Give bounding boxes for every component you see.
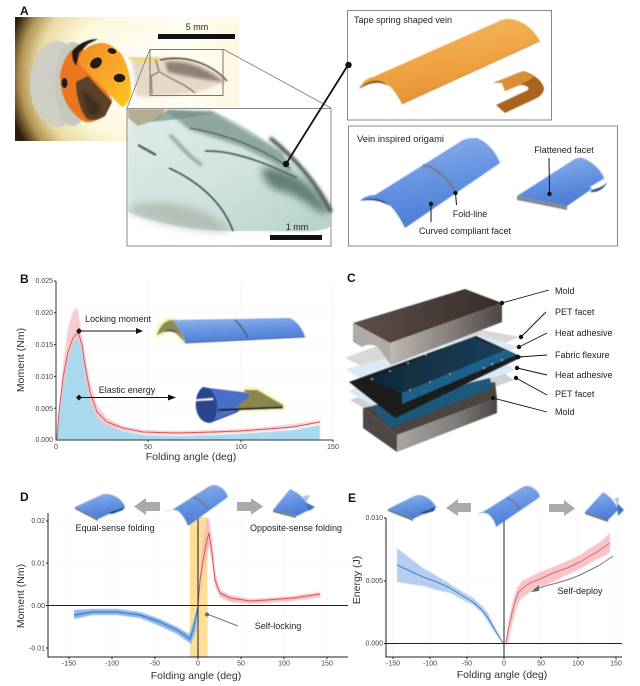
callout line from vein to detail boxes bbox=[283, 62, 352, 167]
label B: B bbox=[20, 272, 29, 286]
x ticks: 150 bbox=[327, 444, 339, 451]
negative energy curve bbox=[397, 565, 503, 643]
x ticks: -150 bbox=[62, 660, 76, 668]
scale bar 1 mm: 1 mm bbox=[286, 222, 308, 232]
panel B: moment chart bbox=[15, 272, 339, 463]
bottom mold bbox=[363, 378, 497, 452]
x ticks: 100 bbox=[235, 444, 247, 451]
axes bbox=[54, 281, 333, 442]
top PET layer bbox=[345, 322, 520, 385]
moment band bbox=[57, 307, 320, 438]
y-axis title: Energy (J) bbox=[351, 556, 363, 604]
x ticks: 150 bbox=[321, 660, 333, 668]
icon: flat origami centre bbox=[165, 485, 228, 526]
x ticks: 100 bbox=[572, 660, 584, 668]
bottom PET layer bbox=[350, 354, 514, 424]
gridlines bbox=[48, 513, 348, 657]
x ticks: 0 bbox=[502, 660, 506, 668]
positive energy band bbox=[506, 533, 610, 643]
x-axis title: Folding angle (deg) bbox=[146, 451, 236, 463]
self-deploy callout bbox=[531, 556, 613, 596]
moment curve bbox=[57, 333, 320, 439]
x ticks: 50 bbox=[537, 660, 545, 668]
orange tape spring bbox=[359, 19, 540, 104]
callout: mold bottom bbox=[491, 396, 575, 417]
x ticks: -100 bbox=[105, 660, 119, 668]
negative moment curve bbox=[74, 607, 198, 639]
callout: fabric flexure bbox=[516, 350, 610, 360]
flattened facet origami bbox=[517, 158, 607, 210]
elastic energy annotation: Elastic energy bbox=[99, 385, 156, 395]
fabric flexure bbox=[349, 336, 522, 418]
callout: PET facet top: PET facet bbox=[555, 307, 595, 317]
arrow right bbox=[549, 500, 575, 516]
arrow left bbox=[446, 499, 471, 516]
label: flattened facet bbox=[534, 145, 594, 196]
x ticks: 50 bbox=[237, 660, 245, 668]
icon: straight locked origami bbox=[155, 318, 305, 344]
y ticks: 0.000 bbox=[365, 640, 383, 648]
y ticks bbox=[35, 278, 53, 444]
callout: mold top bbox=[500, 286, 575, 305]
callout: heat adhesive top: Heat adhesive bbox=[555, 328, 613, 338]
bottom adhesive layer bbox=[348, 345, 516, 415]
self-deploy callout: Self-deploy bbox=[557, 586, 603, 596]
callout: PET facet top bbox=[519, 307, 595, 339]
scale bar 5 mm: 5 mm bbox=[186, 22, 208, 32]
callout: mold bottom: Mold bbox=[555, 407, 575, 417]
elastic energy area bbox=[57, 335, 320, 440]
photo: ladybug with unfolded wing bbox=[15, 17, 239, 141]
gridlines bbox=[57, 281, 333, 440]
micrograph of wing vein bbox=[127, 108, 331, 246]
exploded layer stack bbox=[345, 289, 522, 452]
icon: opposite-sense origami bbox=[585, 492, 624, 522]
label: curved compliant facet: Curved compliant facet bbox=[419, 226, 512, 236]
x ticks bbox=[386, 660, 622, 668]
y ticks: 0.005 bbox=[365, 578, 383, 585]
callout: fabric flexure: Fabric flexure bbox=[555, 350, 610, 360]
panel A: ladybug and vein bbox=[15, 4, 618, 246]
icon: equal-sense flattened origami bbox=[388, 495, 436, 521]
y ticks: 0.02 bbox=[31, 518, 45, 525]
scale bar 5 mm bbox=[158, 22, 235, 39]
elastic energy annotation bbox=[76, 385, 176, 400]
y-axis title: Moment (Nm) bbox=[15, 328, 27, 392]
label: fold-line bbox=[453, 191, 487, 219]
y-axis title: Moment (Nm) bbox=[15, 564, 27, 628]
y ticks: 0.025 bbox=[35, 278, 53, 285]
callout: heat adhesive bottom bbox=[515, 366, 613, 380]
yellow self-locking band bbox=[190, 517, 208, 657]
x-axis title: Folding angle (deg) bbox=[151, 670, 241, 682]
positive energy curve bbox=[506, 543, 610, 643]
self-locking callout bbox=[205, 612, 301, 631]
x ticks bbox=[54, 444, 339, 451]
label C: C bbox=[347, 271, 356, 285]
y ticks: 0.020 bbox=[35, 310, 53, 317]
icon: flat origami centre bbox=[477, 486, 540, 527]
callout: PET facet bottom bbox=[514, 376, 595, 399]
label D: D bbox=[20, 490, 29, 504]
y ticks bbox=[365, 515, 383, 648]
y ticks: 0.010 bbox=[35, 374, 53, 381]
y ticks: -0.01 bbox=[29, 646, 45, 652]
heading: Vein inspired origami bbox=[357, 134, 444, 144]
x ticks: -50 bbox=[462, 660, 472, 668]
positive moment band bbox=[198, 518, 321, 606]
icon: opposite-sense origami bbox=[273, 489, 315, 518]
x ticks: 100 bbox=[278, 660, 290, 668]
callout: PET facet bottom: PET facet bbox=[555, 389, 595, 399]
x ticks: 0 bbox=[196, 660, 200, 668]
callout: mold top: Mold bbox=[555, 286, 575, 296]
negative energy band bbox=[397, 548, 503, 643]
icon: bent origami bbox=[195, 387, 285, 423]
negative moment band bbox=[74, 606, 198, 644]
axes bbox=[46, 513, 348, 659]
top adhesive layer bbox=[345, 335, 520, 395]
y ticks: 0.00 bbox=[31, 603, 45, 610]
locking moment annotation bbox=[76, 314, 152, 334]
callout: heat adhesive top bbox=[517, 328, 613, 349]
y ticks: 0.015 bbox=[35, 342, 53, 349]
locking moment annotation: Locking moment bbox=[85, 314, 152, 324]
scale bar 1 mm bbox=[270, 222, 322, 240]
top mold bbox=[353, 289, 502, 365]
x ticks: 0 bbox=[54, 444, 58, 451]
x ticks bbox=[62, 660, 333, 668]
y ticks: 0.005 bbox=[35, 406, 53, 413]
callout: heat adhesive bottom: Heat adhesive bbox=[555, 370, 613, 380]
arrow left bbox=[134, 498, 160, 515]
gridlines bbox=[386, 518, 622, 657]
equal-sense label: Equal-sense folding bbox=[75, 523, 155, 533]
y ticks: 0.010 bbox=[365, 515, 383, 522]
y ticks: 0.000 bbox=[35, 437, 53, 444]
panel C: layered fabrication bbox=[345, 271, 613, 452]
y ticks bbox=[29, 518, 45, 652]
panel E: energy vs folding angle bbox=[348, 486, 624, 681]
x ticks: 50 bbox=[144, 444, 152, 451]
x ticks: 150 bbox=[610, 660, 622, 668]
panel D: moment vs folding angle bbox=[15, 485, 348, 682]
heading: Tape spring shaped vein bbox=[354, 15, 452, 25]
zoom connector lines bbox=[127, 49, 331, 108]
box: vein inspired origami bbox=[348, 126, 618, 246]
x ticks: -50 bbox=[150, 660, 160, 668]
opposite-sense label: Opposite-sense folding bbox=[250, 523, 342, 533]
axes bbox=[384, 518, 622, 659]
blue curved origami bbox=[360, 138, 500, 228]
label A: A bbox=[20, 4, 29, 18]
label: flattened facet: Flattened facet bbox=[534, 145, 594, 155]
y ticks: 0.01 bbox=[31, 560, 45, 568]
positive moment curve bbox=[198, 533, 320, 605]
folded orange tape spring bbox=[493, 71, 544, 113]
x ticks: -100 bbox=[423, 660, 437, 668]
label: fold-line: Fold-line bbox=[453, 209, 487, 219]
x ticks: -150 bbox=[386, 660, 400, 668]
box: tape spring shaped vein bbox=[348, 10, 552, 120]
x-axis title: Folding angle (deg) bbox=[457, 669, 547, 681]
arrow right bbox=[237, 498, 263, 515]
label: curved compliant facet bbox=[419, 202, 512, 236]
icon: equal-sense flattened origami bbox=[75, 494, 125, 521]
inset frame on wing bbox=[150, 50, 223, 96]
label E: E bbox=[348, 491, 356, 505]
self-locking callout: Self-locking bbox=[255, 621, 301, 631]
